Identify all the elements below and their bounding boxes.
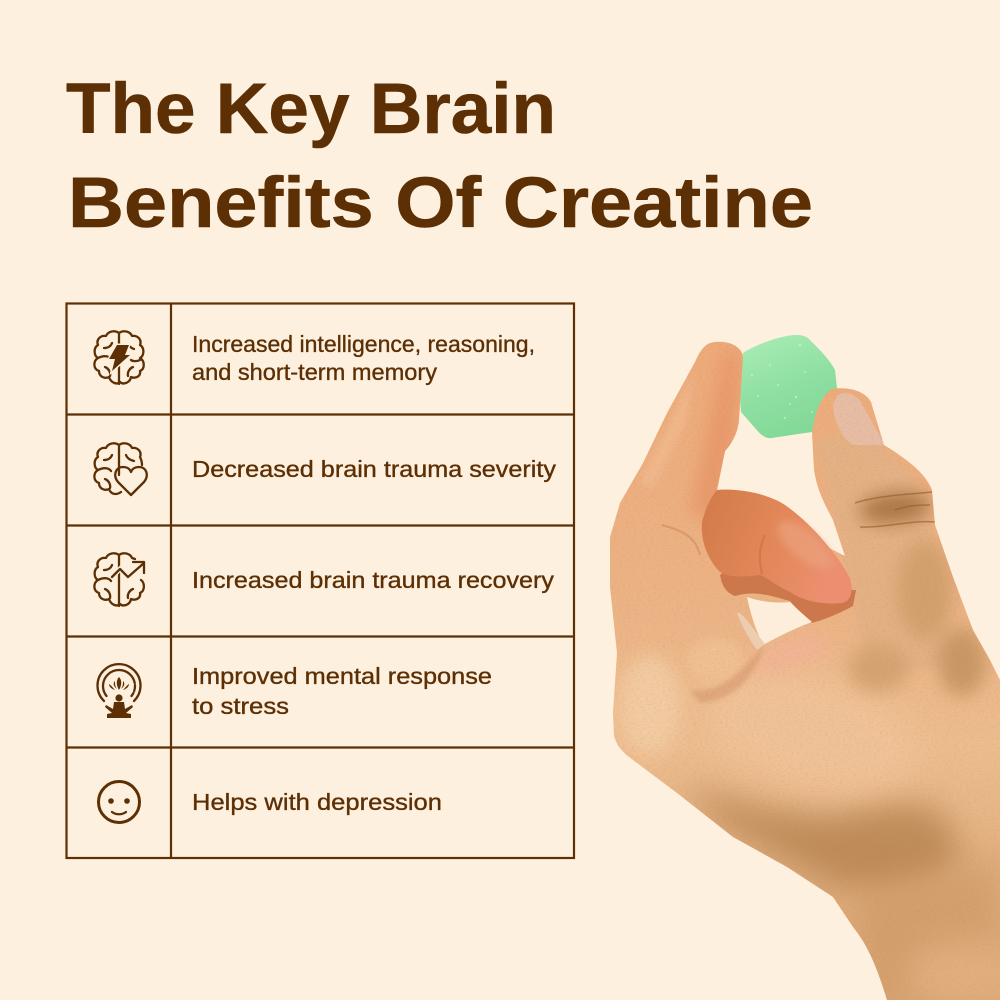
text (192, 663, 492, 719)
thumb (822, 439, 928, 662)
photo: hand holding green gummy (600, 330, 1000, 1000)
gap between fingers (747, 597, 812, 645)
pale fingertip sliver (737, 612, 765, 650)
skin texture (600, 330, 1000, 1000)
text: and short-term memory (192, 359, 438, 385)
title: Benefits Of Creatine (68, 164, 813, 243)
icon: meditating figure with lotus (98, 664, 140, 718)
text: Helps with depression (192, 789, 442, 815)
text: Increased brain trauma recovery (192, 567, 555, 593)
title: The Key Brain (66, 70, 556, 149)
middle finger knuckle crease (760, 535, 765, 574)
middle finger highlight (770, 512, 840, 578)
icon: brain with heart (94, 443, 147, 495)
text: Decreased brain trauma severity (192, 456, 557, 482)
text (192, 331, 535, 385)
table grid (66, 303, 574, 858)
thumb base tone (897, 540, 953, 640)
wrist shadow (680, 785, 965, 890)
back of hand light area (718, 678, 898, 796)
row 5: depression (98, 782, 442, 822)
green gummy (740, 335, 837, 438)
text: Improved mental response (192, 663, 492, 689)
row 4: stress response (98, 663, 492, 719)
index finger highlight (644, 390, 690, 484)
thumb knuckle shadow (858, 489, 932, 527)
hand (600, 330, 1000, 1000)
benefits table (66, 303, 574, 858)
palm pale edge (618, 655, 682, 755)
back of hand shadows (848, 644, 908, 692)
curled middle finger (702, 490, 852, 604)
wrinkle lines (855, 492, 935, 527)
icon: smiley face (98, 782, 140, 822)
row 2: brain trauma severity (94, 443, 557, 495)
text: to stress (192, 693, 289, 719)
index finger shading (690, 350, 740, 520)
pink base of thumb (772, 638, 818, 661)
ring finger (720, 566, 856, 623)
wrist lighter patch (905, 940, 1000, 1000)
thumb nail (833, 393, 885, 445)
row 3: brain trauma recovery (94, 553, 555, 606)
index to palm crease (662, 525, 700, 555)
row 1: intelligence (94, 331, 535, 385)
palm crease (692, 650, 762, 704)
text: Increased intelligence, reasoning, (192, 331, 535, 357)
palm mound below gap (690, 641, 736, 668)
icon: brain with rising arrow (94, 553, 144, 606)
title (66, 70, 813, 243)
icon: brain with lightning bolt (94, 331, 144, 384)
wrist lower tone (850, 850, 1000, 1000)
palm, wrist and fingers base (600, 330, 1000, 1000)
